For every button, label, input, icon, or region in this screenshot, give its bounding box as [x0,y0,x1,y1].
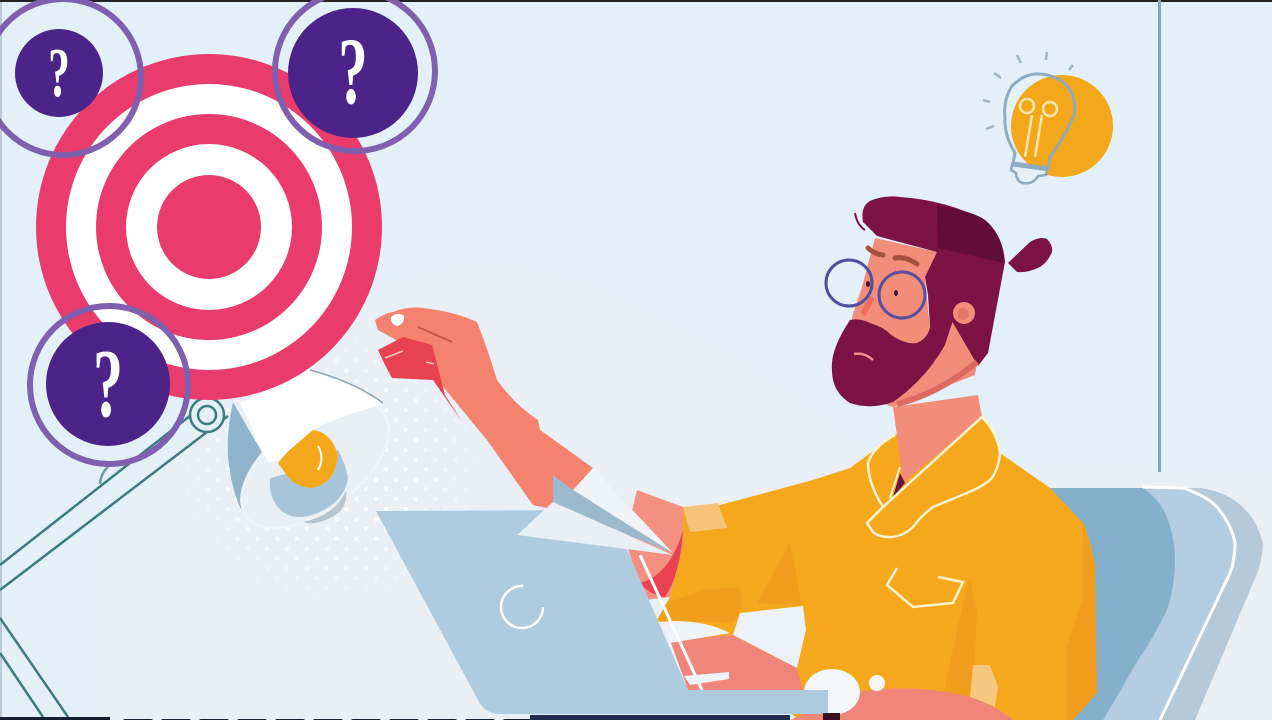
background swoosh [110,270,1272,720]
icon: question badge bottom left [30,306,188,464]
icon: paper plane [517,468,673,555]
man: neck and collar [867,395,1000,537]
ear [953,302,975,324]
glasses [826,260,872,306]
icon: question badge top left: ? [48,33,70,112]
icon: question badge bottom left: ? [93,331,123,438]
man: shirt [657,417,1097,720]
gap between arm and torso [733,606,806,668]
icon: question badge top right [275,0,435,151]
chair [1047,487,1263,720]
brows [868,248,917,264]
lamp arm [0,398,228,717]
man: raised arm and hand [375,308,600,520]
hair [862,196,1005,366]
window frame line [1158,0,1161,472]
icon: question badge top right: ? [338,20,368,125]
laptop [376,510,828,714]
shirt pocket [887,568,963,607]
man: upper arm behind plane [625,490,684,600]
icon: target [36,54,382,400]
icon: question badge top left [0,0,141,155]
icon: light bulb [983,52,1113,183]
icon: desk lamp [219,370,411,553]
bottom edge strip [0,715,790,720]
man: lower hand and cuff [640,555,1013,720]
man: head [826,196,1052,407]
beard [832,295,953,406]
dotted halftone [206,352,456,578]
